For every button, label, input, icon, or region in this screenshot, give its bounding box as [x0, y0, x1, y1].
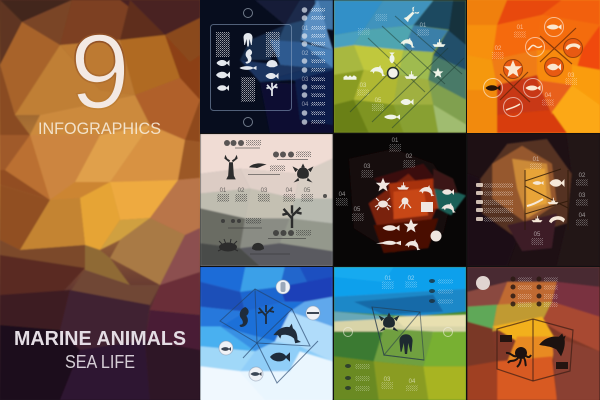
icon: angelfish [550, 179, 564, 187]
icon: ship [404, 71, 418, 79]
icon: small fish [532, 181, 544, 185]
icon: coral [282, 205, 302, 228]
big number 9: 9 [70, 13, 130, 131]
icon: octopus [506, 347, 531, 367]
subtitle: infographics: INFOGRAPHICS [38, 120, 161, 138]
icon: shell [252, 243, 264, 250]
right side list [302, 7, 325, 125]
cover polygon background [0, 0, 200, 400]
icon: star [376, 178, 390, 191]
icon: square card [421, 202, 433, 212]
panel 2: blue and olive diagonal [334, 0, 466, 132]
button glyphs [221, 282, 319, 376]
list placeholder text [311, 8, 325, 124]
icon: small shark [221, 347, 231, 351]
icon: fish [389, 52, 395, 64]
panel 6 numbered text: 05 [534, 232, 541, 238]
placeholder text blocks [217, 140, 313, 236]
icon: coral [258, 305, 274, 324]
numbered steps 01-05 [220, 188, 311, 194]
list numbers: 01 [302, 26, 309, 32]
icon: whale [382, 225, 400, 231]
panel 9 polygon background [467, 267, 600, 400]
icon: eel [528, 45, 542, 50]
panel 6 numbered text: 02 [579, 173, 586, 179]
arrow buttons [244, 8, 252, 126]
icon: fish [266, 73, 278, 79]
icon: fish [217, 85, 229, 91]
list numbers: 04 [302, 102, 309, 108]
panel 3 polygon background [467, 0, 600, 133]
dark list bullets [510, 276, 542, 306]
list placeholder text [484, 183, 513, 222]
icon: dolphin [405, 239, 420, 250]
icon: ship [397, 182, 409, 190]
numbers: 04 [409, 379, 416, 385]
icon frame [210, 24, 292, 110]
panel 3 numbered text: 03 [568, 73, 575, 79]
filled circles [504, 38, 582, 78]
icon: dolphin [273, 324, 301, 343]
panel 6: dark amber [468, 134, 600, 266]
panel 5 numbered text [336, 138, 415, 221]
panel 4 dark animal icons [218, 155, 313, 252]
panel 6 numbered text [530, 157, 588, 245]
icon: shell [266, 60, 278, 67]
panel 3 numbered text: 01 [517, 25, 524, 31]
icon: coral tile [280, 282, 286, 292]
icon: lobster [403, 6, 420, 23]
icon: crab group [344, 75, 356, 80]
list numbers: 02 [302, 51, 309, 57]
panel 6 polygon background [468, 134, 600, 266]
circles with icons [484, 18, 582, 116]
panel 4 polygon background [200, 134, 333, 266]
kite outline lines [220, 289, 318, 383]
black label rectangles [500, 335, 568, 369]
numbers: 01 [385, 276, 392, 282]
panel 1 polygon background [200, 0, 333, 133]
panel 6 animal icons [527, 179, 565, 223]
placeholder text blocks [355, 279, 453, 391]
round buttons [219, 280, 320, 381]
centre circle icon [388, 68, 398, 78]
icon: jellyfish [244, 33, 252, 46]
panel 1: dark navy grid [200, 0, 333, 133]
panel 7 polygon background [200, 267, 333, 400]
numbers: 02 [408, 276, 415, 282]
icon: dark fish [486, 85, 500, 91]
panel 2 numbered text [357, 14, 429, 111]
hexagon frame lines [497, 319, 573, 381]
panel 7: blue to white [200, 267, 333, 400]
icon: manta ray [539, 333, 566, 356]
left list [476, 183, 513, 222]
icon: coral [266, 83, 278, 96]
icon: shark [384, 114, 400, 120]
panel 5 numbered text: 02 [406, 154, 413, 160]
panel 5 numbered text: 04 [339, 192, 346, 198]
panel 5 numbered text: 03 [364, 164, 371, 170]
fan lines [525, 169, 568, 230]
icon: small ship [532, 216, 542, 222]
numbered steps 01-05: 04 [286, 188, 293, 194]
panel 6 numbered text: 03 [579, 193, 586, 199]
icon: minus bar [307, 312, 319, 314]
icon: round button [430, 230, 442, 242]
list numbers: 03 [302, 77, 309, 83]
panel 4: pale grey with dark animals [200, 134, 332, 266]
icon: turtle [379, 313, 399, 332]
numbers [384, 276, 416, 385]
icon: dolphin [441, 203, 456, 213]
panel 2 numbered text: 01 [420, 23, 427, 29]
title: marine animals: MARINE ANIMALS [14, 327, 186, 350]
kite animal icons [240, 305, 301, 362]
icon: dolphin [419, 185, 434, 196]
panel 3: orange circles [467, 0, 600, 133]
icon: shrimp [566, 43, 580, 50]
icon: shrimp [549, 216, 565, 223]
icon: small fish [250, 372, 262, 376]
list bullets [476, 183, 483, 221]
icon: lobster [224, 155, 238, 179]
panel 2 polygon background [334, 0, 466, 133]
icon: dolphin [400, 38, 415, 48]
shadow underlines [228, 148, 308, 254]
frame lines [372, 307, 424, 360]
diagonal lattice lines [350, 16, 464, 128]
icon: octopus [399, 198, 411, 209]
icon: fish [216, 60, 230, 66]
panel 2 animal icons [344, 6, 446, 120]
icon: ship [432, 39, 446, 47]
menu circle [476, 276, 490, 290]
panel: cover [0, 0, 200, 400]
small dark icon list [345, 279, 435, 390]
icon: fish [216, 72, 230, 78]
numbered steps 01-05: 03 [261, 188, 268, 194]
icon: urchin [218, 239, 238, 252]
icon: dolphin [370, 65, 385, 76]
icon: long fish [240, 66, 256, 70]
icon: flying fish [270, 352, 290, 362]
panel 5 polygon background [334, 134, 466, 266]
icon: jellyfish [399, 334, 413, 354]
icon: lizard [506, 104, 520, 110]
icon: shark [526, 85, 540, 91]
list numbers [302, 26, 309, 108]
numbered steps 01-05: 02 [238, 188, 245, 194]
icon: swordfish [376, 241, 401, 245]
panel 5 numbered text: 01 [392, 138, 399, 144]
panel 3 numbered text: 04 [545, 93, 552, 99]
icon: turtle [293, 164, 313, 183]
panel 6 numbered text: 01 [533, 157, 540, 163]
list placeholder text [518, 277, 558, 307]
panel 8 polygon background [334, 267, 466, 400]
icon: seahorse [246, 49, 252, 64]
panel 6 numbered text: 04 [579, 213, 586, 219]
numbers: 03 [384, 377, 391, 383]
panel 2 numbered text: 03 [360, 83, 367, 89]
subtitle: sea life: SEA LIFE [65, 352, 135, 372]
panel 9: warm hexagon [467, 267, 600, 400]
panel 5: black with red glow [334, 134, 466, 266]
panel 5 animal icons [375, 178, 456, 250]
icon: manta [249, 163, 267, 168]
icon: shell [546, 24, 562, 30]
icon: ship [548, 198, 558, 204]
arrow circles [344, 328, 452, 336]
icon: star [404, 219, 418, 232]
panel 5 numbered text: 05 [354, 207, 361, 213]
numbered steps 01-05: 05 [304, 188, 311, 194]
panel 3 numbered text [492, 25, 577, 106]
icon: star [504, 60, 522, 77]
icon: star [433, 68, 443, 78]
panel 3 numbered text: 02 [495, 46, 502, 52]
list bullets [302, 7, 307, 125]
small round bullets [221, 140, 327, 236]
icon: angel fish [442, 189, 454, 195]
panel 8: sky, sand and green [334, 267, 466, 400]
placeholder text blocks [216, 32, 280, 102]
panel 2 numbered text: 05 [375, 98, 382, 104]
icon: striped fish [400, 99, 414, 105]
icon: seahorse [240, 307, 249, 327]
cross lines [500, 28, 576, 102]
icon: lizard [527, 199, 543, 206]
outline circles [484, 18, 564, 116]
icon: crab [375, 198, 391, 210]
animal icons grid [216, 33, 278, 96]
icon: fish [547, 64, 561, 70]
numbered steps 01-05: 01 [220, 188, 227, 194]
